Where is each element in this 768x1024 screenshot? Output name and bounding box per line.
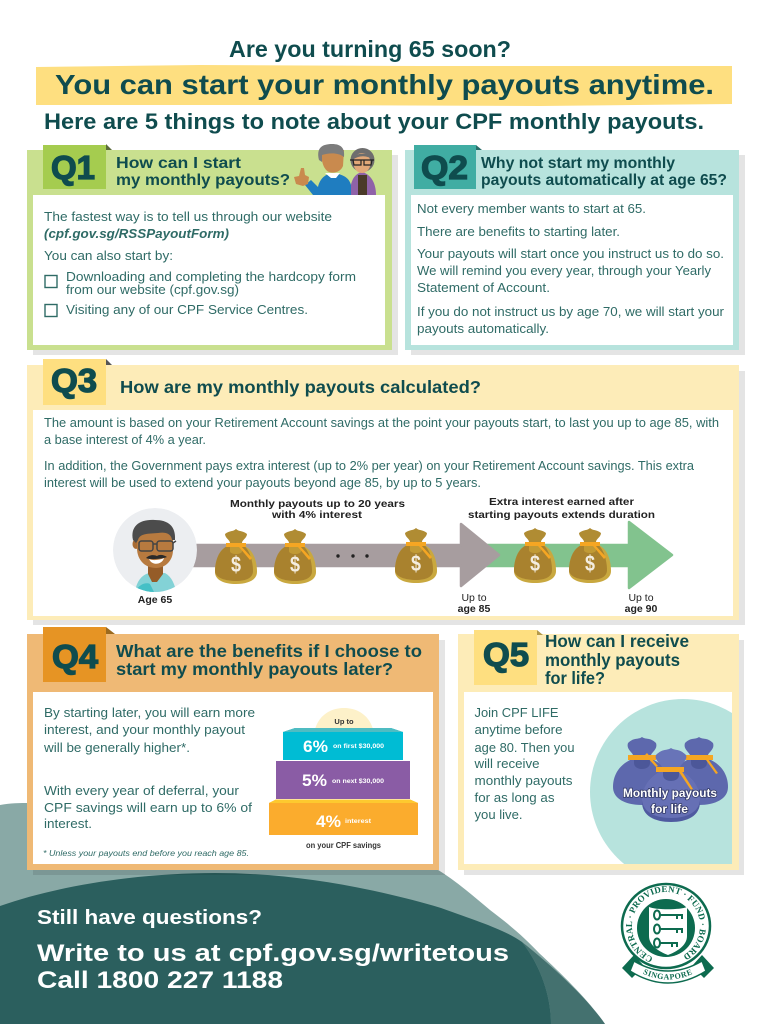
Q2 heading: Why not start my monthly: [481, 155, 675, 172]
title: are you turning 65: Are you turning 65 soon?: [229, 36, 511, 62]
Q4 body text: interest, and your monthly payout: [44, 722, 245, 737]
icon: money bag 1: $: [231, 552, 241, 577]
Q2 tag: [414, 145, 476, 189]
footnote: * Unless your payouts end before you reach age 85.: [43, 849, 249, 858]
footer call to action: Still have questions?: [37, 906, 262, 929]
shield with keys: [649, 907, 687, 955]
icon: money bag 2: [274, 529, 316, 584]
label: up to age 90: Up to: [628, 592, 654, 604]
icon: couple with thumbs up: [294, 144, 376, 195]
Q3 body text: [44, 415, 719, 490]
label: up to age 85: [458, 592, 490, 615]
footer call to action: [37, 906, 509, 994]
step: 6 percent: 6%: [303, 737, 328, 756]
Q5 body text: will receive: [473, 756, 540, 771]
Q2 body text: Your payouts will start once you instruct us to do so.: [417, 246, 724, 261]
grey arrow: [190, 524, 499, 586]
Q3 heading: How are my monthly payouts calculated?: [120, 377, 481, 397]
label: up to age 90: [625, 592, 657, 615]
Q3 body text: interest will be used to extend your payouts beyond age 85, by up to 5 years.: [44, 475, 481, 490]
Q5 tag: Q5: [483, 636, 529, 673]
Q3 tag: [43, 359, 106, 405]
Q2 body text: payouts automatically.: [417, 321, 549, 336]
Q4 body text: [43, 705, 255, 831]
Q5 body text: you live.: [474, 807, 522, 822]
icon: money bag 4: $: [530, 551, 540, 576]
checklist item 1: [45, 269, 356, 297]
banner: start anytime: You can start your monthly payouts anytime.: [55, 69, 714, 100]
Q3 tag: Q3: [51, 362, 97, 399]
avatar: man at age 65: [113, 508, 197, 592]
Q5 body text: anytime before: [474, 722, 562, 737]
Q1 heading: [116, 155, 290, 189]
Q1 heading: How can I start: [116, 155, 242, 172]
footer background: dark curve: [0, 873, 551, 1024]
Q2 tag: Q2: [421, 149, 468, 186]
label: monthly payouts 20 years: Monthly payouts up to 20 years: [230, 498, 405, 510]
checklist item 1: from our website (cpf.gov.sg): [66, 282, 239, 297]
step: 5 percent: on next $30,000: [332, 778, 384, 785]
Q1 heading: my monthly payouts?: [116, 172, 290, 189]
panel: Q3: [27, 359, 745, 625]
Q4 body text: With every year of deferral, your: [44, 783, 240, 798]
Q4 body text: By starting later, you will earn more: [44, 705, 255, 720]
Q3 body text: In addition, the Government pays extra interest (up to 2% per year) on your Retirement Account savings. This extra: [44, 458, 695, 473]
panel: Q5: [458, 630, 744, 875]
step: 4 percent: [269, 800, 418, 835]
Q5 heading: monthly payouts: [545, 650, 680, 670]
footer call to action: Write to us at cpf.gov.sg/writetous: [37, 940, 509, 967]
ribbon: Singapore: SINGAPORE: [643, 969, 692, 980]
icon: money bag 5: $: [585, 551, 595, 576]
panel: Q1: [27, 144, 398, 355]
icon: left bag: [613, 737, 671, 805]
Q4 tag: Q4: [52, 638, 99, 675]
seal ring text: CENTRAL · PROVIDENT · FUND · BOARD: [626, 886, 706, 962]
checklist item 1: Downloading and completing the hardcopy form: [66, 269, 356, 284]
step: 4 percent: 4%: [316, 812, 341, 831]
label: up to age 90: age 90: [625, 603, 657, 615]
Q5 heading: How can I receive: [545, 631, 689, 651]
Q1 tag: Q1: [51, 149, 95, 186]
Q5 heading: for life?: [545, 668, 605, 688]
Q2 body text: If you do not instruct us by age 70, we will start your: [417, 304, 725, 319]
Q4 heading: What are the benefits if I choose to: [116, 641, 422, 661]
step: 5 percent: 5%: [302, 771, 327, 790]
label: monthly payouts 20 years: [230, 498, 405, 521]
footer background: light curve: [0, 803, 605, 1024]
Q1 tag: [43, 145, 106, 189]
Q2 body text: There are benefits to starting later.: [417, 224, 620, 239]
stepped interest chart: Up to: [334, 717, 354, 726]
Q2 heading: [481, 155, 727, 189]
Q4 heading: [116, 641, 422, 679]
label: age 65: Age 65: [138, 594, 172, 606]
Q2 body text: We will remind you every year, through your Yearly: [417, 263, 711, 278]
label: monthly payouts for life: for life: [651, 804, 688, 816]
caption: on your CPF savings: on your CPF savings: [306, 841, 382, 850]
Q4 tag: [43, 627, 106, 682]
footer background: overlap tone: [522, 942, 605, 1024]
green arrow: [485, 522, 672, 588]
Q2 heading: payouts automatically at age 65?: [481, 172, 727, 189]
footer call to action: Call 1800 227 1188: [37, 967, 283, 994]
illustration: money bags for life: [590, 699, 732, 864]
icon: right bag: [670, 737, 728, 805]
label: monthly payouts for life: [623, 788, 717, 816]
panel: Q4: [27, 627, 445, 875]
icon: front bag: [642, 748, 700, 822]
Q5 body text: age 80. Then you: [474, 740, 574, 755]
Q5 body text: for as long as: [474, 790, 555, 805]
Q2 body text: Statement of Account.: [417, 280, 550, 295]
subtitle: five things: Here are 5 things to note about your CPF monthly payouts.: [44, 109, 704, 134]
banner: start anytime: [36, 65, 732, 106]
icon: money bag 1: [215, 529, 257, 584]
ellipsis dots: [336, 554, 369, 558]
label: monthly payouts for life: Monthly payouts: [623, 788, 717, 800]
Q5 body text: Join CPF LIFE: [474, 705, 559, 720]
timeline diagram: [113, 496, 672, 615]
Q1 body text: You can also start by:: [44, 248, 173, 263]
Q1 body text: (cpf.gov.sg/RSSPayoutForm): [44, 226, 229, 241]
Q5 tag: [474, 630, 537, 685]
stepped interest chart: [269, 708, 418, 850]
icon: money bag 2: $: [290, 552, 300, 577]
checklist item 2: Visiting any of our CPF Service Centres.: [66, 302, 308, 317]
Q4 body text: will be generally higher*.: [43, 740, 190, 755]
Q1 body text: [44, 209, 332, 263]
Q5 body text: [473, 705, 574, 822]
label: monthly payouts 20 years: with 4% interest: [271, 509, 363, 521]
Q5 body text: monthly payouts: [474, 773, 573, 788]
label: extra interest: [468, 496, 655, 521]
icon: money bag 4: [514, 528, 556, 583]
Q2 body text: Not every member wants to start at 65.: [417, 201, 646, 216]
step: 6 percent: [283, 728, 403, 760]
Q4 body text: interest.: [44, 816, 92, 831]
Q3 body text: The amount is based on your Retirement Account savings at the point your payouts start, to last you up to age 85, with: [44, 415, 719, 430]
label: extra interest: Extra interest earned after: [489, 496, 634, 508]
Q5 heading: [545, 631, 689, 688]
label: up to age 85: Up to: [461, 592, 487, 604]
Q2 body text: [417, 201, 725, 336]
label: extra interest: starting payouts extends duration: [468, 509, 655, 521]
icon: money bag 3: [395, 528, 437, 583]
step: 5 percent: [276, 761, 410, 799]
icon: money bag 5: [569, 528, 611, 583]
step: 4 percent: interest: [345, 818, 372, 825]
panel: Q2: [405, 145, 745, 355]
label: up to age 85: age 85: [458, 603, 490, 615]
logo: CPF Board seal: [620, 882, 714, 984]
Q4 body text: CPF savings will earn up to 6% of: [44, 800, 252, 815]
icon: money bag 3: $: [411, 551, 421, 576]
step: 6 percent: on first $30,000: [333, 743, 384, 750]
Q1 body text: The fastest way is to tell us through our website: [44, 209, 332, 224]
Q4 heading: start my monthly payouts later?: [116, 659, 393, 679]
Q3 body text: a base interest of 4% a year.: [44, 432, 206, 447]
